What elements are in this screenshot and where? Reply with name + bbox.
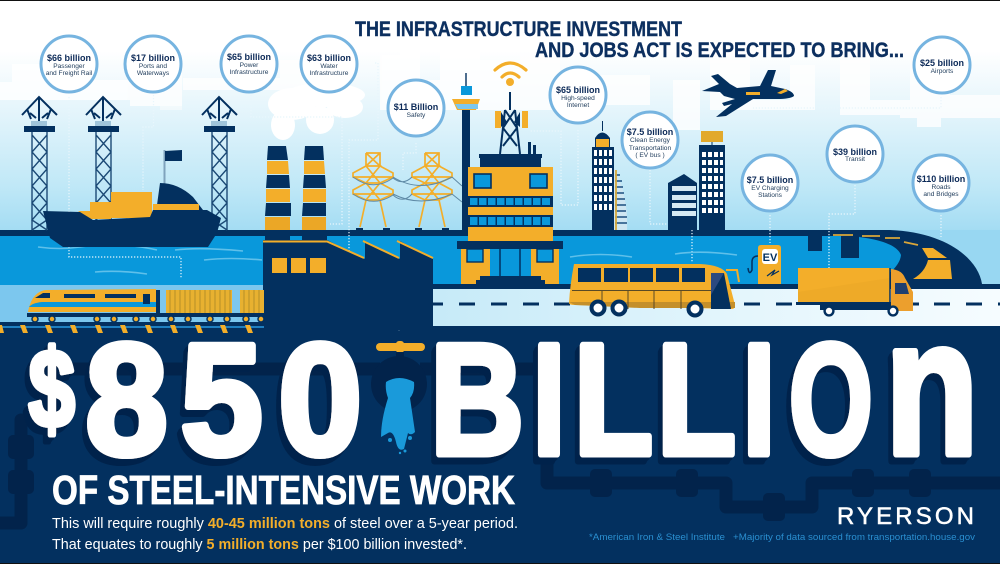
callout: airports: Airports xyxy=(931,68,954,75)
callout: power infrastructure: Infrastructure xyxy=(230,69,269,76)
train yard band xyxy=(0,285,264,323)
callout: water infrastructure: $63 billion xyxy=(307,53,351,63)
icon: valve with water xyxy=(371,341,427,454)
office buildings xyxy=(668,131,725,230)
factory xyxy=(263,240,433,330)
airplane xyxy=(702,70,794,117)
train xyxy=(27,289,264,322)
observation tower xyxy=(452,73,480,232)
horizon line xyxy=(0,230,800,236)
callout: roads and bridges: Roads xyxy=(931,184,951,191)
background sky xyxy=(0,0,1000,232)
footnote: *American Iron & Steel Institute xyxy=(589,532,725,543)
right shore sky xyxy=(790,230,1000,286)
logo: RYERSON xyxy=(837,503,974,530)
callout: safety xyxy=(388,80,444,136)
bus xyxy=(569,264,739,316)
dotted connector lines xyxy=(69,63,941,332)
callout: high-speed internet xyxy=(550,67,606,123)
headline figure: $850 billion: $ xyxy=(28,328,75,451)
callout: clean energy transportation: Transportation xyxy=(629,145,671,152)
icon: crane 2 xyxy=(86,97,121,230)
ev charging station: EV xyxy=(763,252,778,264)
callout: water infrastructure: Infrastructure xyxy=(310,70,349,77)
callout: power infrastructure xyxy=(221,36,277,92)
callout: roads and bridges: $110 billion xyxy=(917,174,965,184)
lower navy panel xyxy=(0,326,1000,564)
railway track xyxy=(0,322,264,336)
callout: ports and waterways: Waterways xyxy=(137,70,170,77)
callout: roads and bridges xyxy=(913,155,969,211)
icon: crane 3 xyxy=(202,97,237,230)
headline figure: $850 billion: I xyxy=(743,312,775,488)
pipe joints xyxy=(8,435,931,521)
headline figure: $850 billion: O xyxy=(789,312,873,488)
water xyxy=(0,236,790,286)
skyline silhouettes xyxy=(0,40,1000,130)
callout: ev charging stations: Stations xyxy=(758,192,783,199)
smokestacks xyxy=(265,146,327,240)
headline figure: $850 billion: L xyxy=(574,312,653,488)
central building xyxy=(457,154,563,284)
callout: ev charging stations: $7.5 billion xyxy=(747,175,793,185)
callout: high-speed internet: Internet xyxy=(567,102,589,109)
footnote xyxy=(589,532,975,543)
callout: safety: Safety xyxy=(407,112,426,119)
headline figure: $850 billion: 0 xyxy=(278,312,362,488)
callout: airports: $25 billion xyxy=(920,58,964,68)
smoke clouds xyxy=(268,83,365,140)
callout: passenger and freight rail: Passenger xyxy=(53,63,86,70)
callout: clean energy transportation: ( EV bus ) xyxy=(635,152,665,159)
callout: ports and waterways xyxy=(125,36,181,92)
background pipes xyxy=(0,369,1000,523)
truck xyxy=(796,268,913,315)
body text xyxy=(52,515,518,553)
headline figure: $850 billion: L xyxy=(657,312,736,488)
callout: clean energy transportation xyxy=(622,112,678,168)
callout: clean energy transportation: $7.5 billion xyxy=(627,127,673,137)
callout: power infrastructure: $65 billion xyxy=(227,52,271,62)
heading xyxy=(355,18,904,62)
road xyxy=(433,284,1000,326)
container ship xyxy=(43,150,221,247)
heading: THE INFRASTRUCTURE INVESTMENT xyxy=(355,18,682,41)
headline figure: $850 billion: I xyxy=(533,312,565,488)
power pylons xyxy=(353,153,462,232)
callout: transit xyxy=(827,126,883,182)
heading: AND JOBS ACT IS EXPECTED TO BRING... xyxy=(535,39,904,62)
callout: airports xyxy=(914,37,970,93)
antenna mast xyxy=(495,92,536,155)
headline figure: $850 billion xyxy=(28,279,978,496)
footnote: +Majority of data sourced from transportation.house.gov xyxy=(733,532,975,543)
water waves xyxy=(38,245,737,274)
callout: water infrastructure xyxy=(301,36,357,92)
icon: wifi signal xyxy=(495,63,526,86)
callout: ports and waterways: Ports and xyxy=(139,63,167,70)
ev charging station xyxy=(748,245,781,284)
callout: passenger and freight rail xyxy=(41,36,97,92)
body text: This will require roughly 40-45 million tons of steel over a 5-year period. xyxy=(52,515,518,532)
callout: power infrastructure: Power xyxy=(240,62,259,69)
headline figure: $850 billion: B xyxy=(430,312,524,488)
callout: transit: Transit xyxy=(845,156,865,163)
headline figure: $850 billion: 8 xyxy=(86,312,168,488)
icon: crane 1 xyxy=(22,97,57,230)
curved bridge xyxy=(790,230,982,284)
headline figure: $850 billion: 5 xyxy=(181,312,263,488)
callout: ports and waterways: $17 billion xyxy=(131,53,175,63)
callout: high-speed internet: High-speed xyxy=(561,95,595,102)
callout: roads and bridges: and Bridges xyxy=(923,191,959,198)
callout: clean energy transportation: Clean Energy xyxy=(630,137,671,144)
callout: transit: $39 billion xyxy=(833,147,877,157)
callout: safety: $11 Billion xyxy=(394,102,438,112)
body text: That equates to roughly 5 million tons per $100 billion invested*. xyxy=(52,536,467,553)
skyscraper with sail tower xyxy=(592,121,627,230)
callout: water infrastructure: Water xyxy=(320,63,338,70)
callout: passenger and freight rail: and Freight Rail xyxy=(46,70,93,77)
subheading: OF STEEL-INTENSIVE WORK xyxy=(52,467,515,513)
callout: passenger and freight rail: $66 billion xyxy=(47,53,91,63)
callout: ev charging stations xyxy=(742,155,798,211)
callout: high-speed internet: $65 billion xyxy=(556,85,600,95)
callout: ev charging stations: EV Charging xyxy=(751,185,789,192)
